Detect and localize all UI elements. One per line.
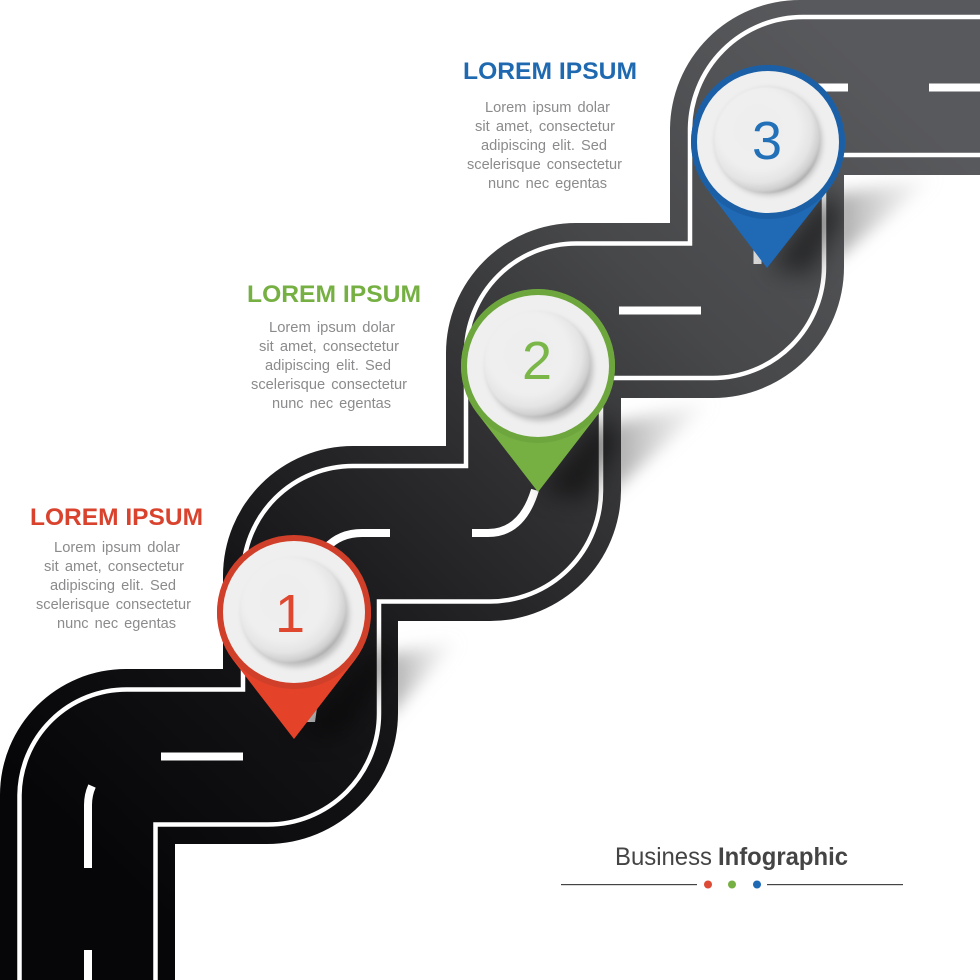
blue pin body [691, 65, 845, 268]
number 3: 3 [752, 111, 782, 171]
body text 3: Lorem ipsum dolar [485, 100, 610, 116]
body text 1 [36, 540, 191, 632]
green pin body [461, 289, 615, 492]
footer rule right [767, 884, 903, 885]
body text 3: scelerisque consectetur [467, 157, 622, 173]
heading 2: LOREM IPSUM [247, 281, 421, 308]
button shadow [716, 89, 822, 195]
footer wordmark: Infographic [718, 843, 848, 871]
pin shadows on the road [296, 190, 844, 739]
ground shadows beside the road [385, 176, 938, 720]
pin border ring [464, 292, 612, 440]
pin button [714, 87, 820, 193]
number 1: 1 [275, 584, 305, 644]
footer title [561, 843, 903, 888]
body text 3: nunc nec egentas [488, 176, 607, 192]
road right edge line [156, 155, 980, 980]
body text 3: sit amet, consectetur [475, 119, 615, 135]
pin 2 (green) [461, 289, 615, 492]
body text 2: scelerisque consectetur [251, 377, 407, 393]
footer rule left [561, 884, 697, 885]
body text 2: nunc nec egentas [272, 396, 391, 412]
body text 2: Lorem ipsum dolar [269, 320, 395, 336]
body text 2: sit amet, consectetur [259, 339, 399, 355]
text block 2 [247, 281, 421, 412]
pin border ring [694, 68, 842, 216]
pin border ring [220, 538, 368, 686]
dash fragment under pin 1 [305, 708, 317, 722]
pin 1 (red) [217, 536, 371, 739]
button shadow [243, 561, 349, 667]
pin white ring [697, 71, 839, 213]
body text 1: sit amet, consectetur [44, 559, 184, 575]
pin 3 (blue) [691, 65, 845, 268]
body text 3 [467, 100, 622, 192]
pin white ring [467, 295, 609, 437]
number 2: 2 [522, 331, 552, 391]
red dot [704, 880, 712, 888]
text block 3 [463, 58, 637, 192]
body text 1: adipiscing elit. Sed [50, 578, 176, 594]
pin white ring [223, 541, 365, 683]
body text 2 [251, 320, 407, 412]
pin button [240, 557, 346, 663]
heading 3: LOREM IPSUM [463, 58, 637, 85]
heading 1: LOREM IPSUM [30, 504, 203, 531]
footer wordmark: Business [615, 843, 712, 871]
body text 1: scelerisque consectetur [36, 597, 191, 613]
body text 1: Lorem ipsum dolar [54, 540, 180, 556]
green dot [728, 880, 736, 888]
body text 3: adipiscing elit. Sed [481, 138, 607, 154]
button shadow [487, 315, 593, 421]
red pin body [217, 536, 371, 739]
body text 1: nunc nec egentas [57, 616, 176, 632]
body text 2: adipiscing elit. Sed [265, 358, 391, 374]
text block 1 [30, 504, 203, 632]
blue dot [753, 880, 761, 888]
pin button [484, 311, 590, 417]
